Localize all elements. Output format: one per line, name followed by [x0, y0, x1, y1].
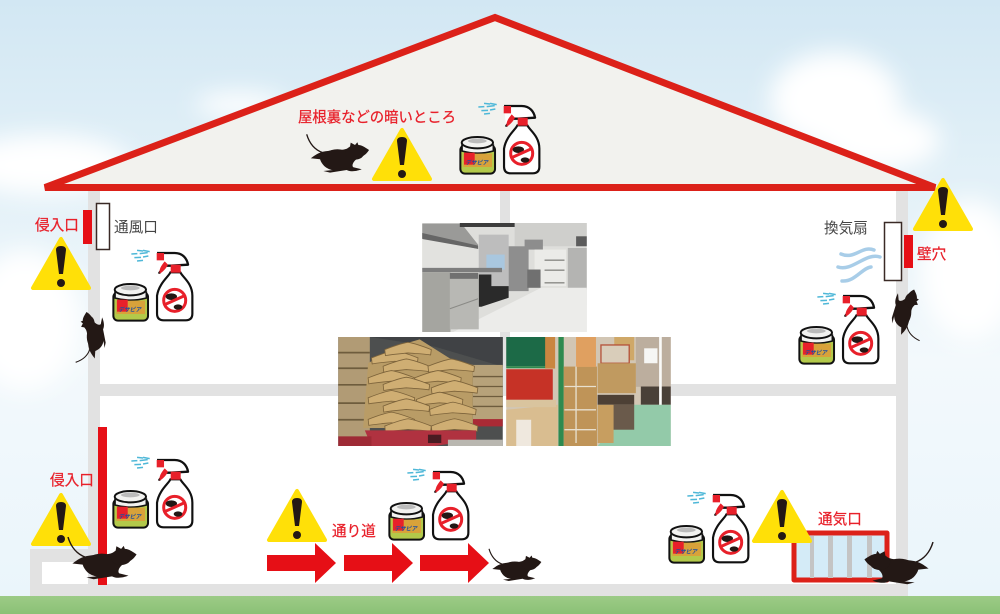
- lower left entry strip: [98, 427, 107, 585]
- rat climbing left wall: [74, 311, 106, 362]
- warning: lower left: [33, 495, 89, 544]
- product: passage: [389, 469, 468, 540]
- label: entry lower left: 侵入口: [50, 472, 94, 489]
- rat climbing right wall: [889, 287, 927, 341]
- vent: ventilation fan: [884, 222, 902, 280]
- warning: attic: [374, 130, 430, 179]
- rat lower right: [864, 542, 933, 584]
- vent: lower right: [794, 533, 887, 580]
- product: upper right: [799, 293, 878, 364]
- label: wall hole: 壁穴: [917, 246, 947, 263]
- rat lower left: [68, 537, 137, 579]
- label: fan: 換気扇: [824, 220, 868, 237]
- right wall hole: [904, 235, 913, 268]
- product: upper left: [113, 250, 192, 321]
- arrow 3: [420, 543, 489, 583]
- left upper entry: red opening: [83, 210, 92, 244]
- warning: passage: [269, 491, 325, 540]
- house walls: [30, 190, 908, 596]
- rat passage: [489, 549, 541, 581]
- roof: [45, 18, 935, 188]
- product: lower right: [669, 492, 748, 563]
- warning: lower right: [754, 492, 810, 541]
- warning: upper left: [33, 239, 89, 288]
- product: attic: [460, 103, 539, 174]
- photo: stacked bags: [338, 337, 503, 446]
- icon: air flow: [838, 249, 880, 281]
- label: entry upper left: 侵入口: [35, 217, 79, 234]
- label: passage: 通り道: [332, 523, 376, 540]
- arrow 2: [344, 543, 413, 583]
- label: air vent: 通風口: [114, 219, 158, 236]
- vent: left upper: [96, 204, 110, 250]
- photo: warehouse: [506, 337, 671, 446]
- warning: upper right: [915, 180, 971, 229]
- product: lower left: [113, 457, 192, 528]
- arrow 1: [267, 543, 336, 583]
- grass: [0, 596, 1000, 614]
- attic label: 屋根裏などの暗いところ: [298, 109, 456, 126]
- label: ventilation opening: 通気口: [818, 511, 862, 528]
- photo: kitchen: [422, 223, 587, 332]
- rat in attic: [307, 134, 369, 173]
